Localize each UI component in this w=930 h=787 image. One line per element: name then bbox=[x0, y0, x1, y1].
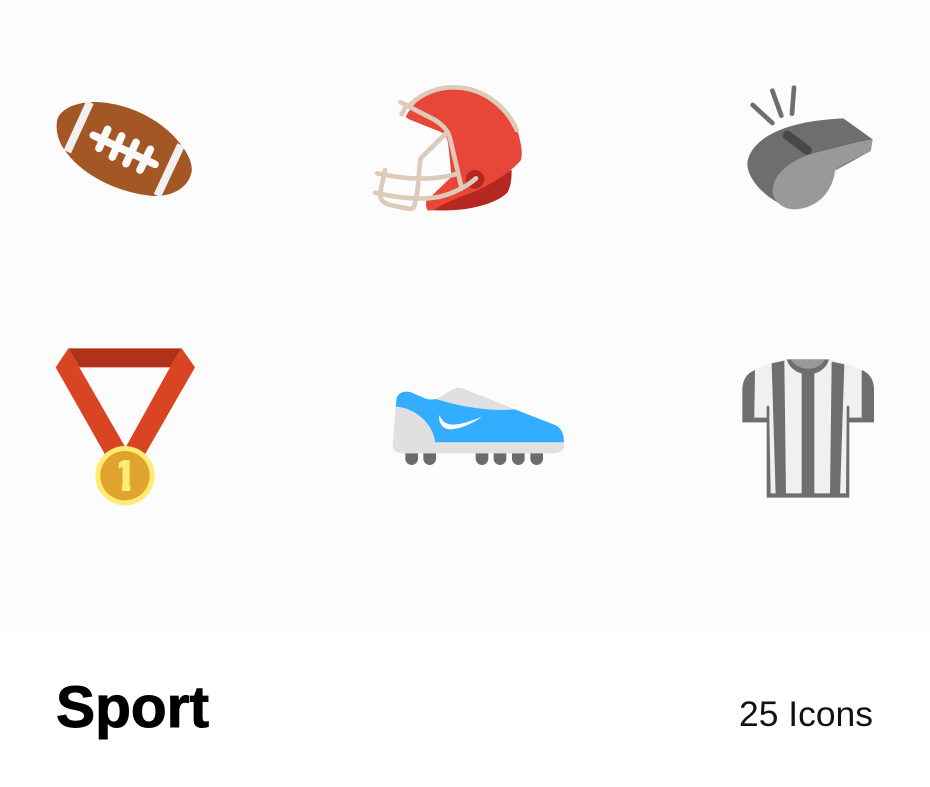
medal number: 1 bbox=[113, 451, 137, 500]
icon: red football helmet bbox=[375, 87, 522, 211]
icon: referee whistle bbox=[747, 88, 873, 209]
icon count label: 25 Icons bbox=[739, 695, 873, 734]
icon: blue football cleat bbox=[393, 388, 564, 465]
title: Sport bbox=[56, 675, 209, 740]
icon: gold medal with ribbon bbox=[56, 348, 195, 505]
icon: striped referee shirt bbox=[742, 359, 874, 498]
icon: american football bbox=[57, 102, 192, 196]
